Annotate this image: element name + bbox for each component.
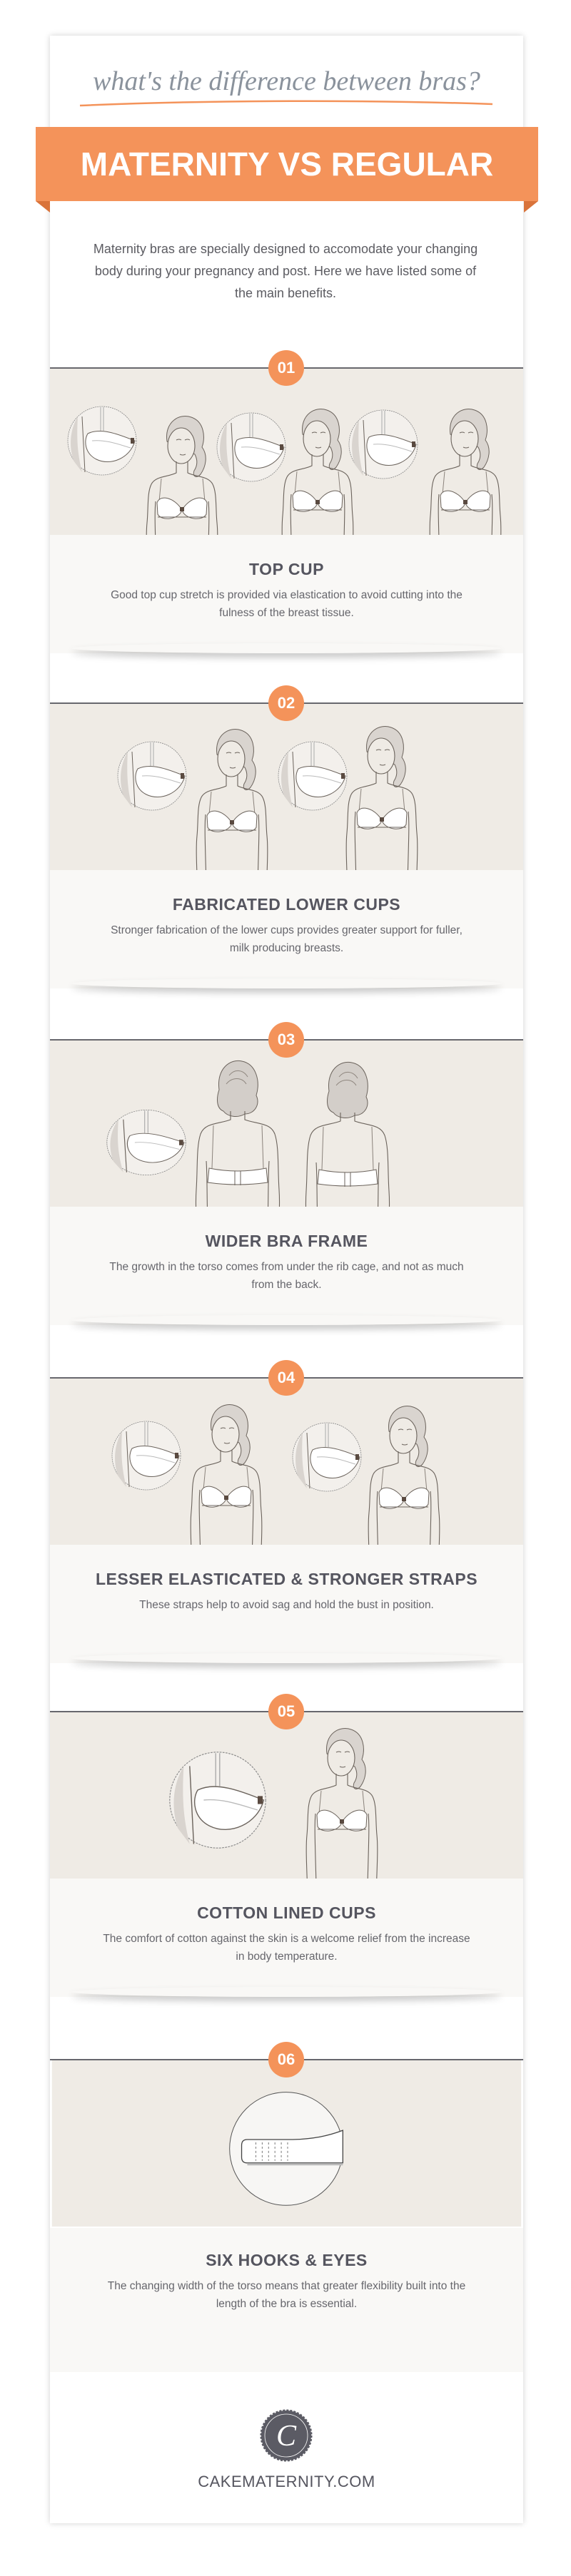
number 02	[268, 685, 304, 721]
heading: six hooks: SIX HOOKS & EYES	[206, 2251, 368, 2269]
number 01: 01	[278, 359, 295, 377]
title underline	[80, 100, 492, 107]
illustration 02	[50, 704, 523, 870]
script title: what's the difference between bras?	[93, 66, 480, 96]
number 03	[268, 1022, 304, 1058]
illustration 06: hooks	[51, 2060, 521, 2227]
website: CAKEMATERNITY.COM	[198, 2473, 375, 2490]
banner	[36, 127, 538, 213]
section 06	[50, 2042, 523, 2372]
number 03: 03	[278, 1031, 295, 1048]
text: wider frame: The growth in the torso comes from under the rib cage, and not as much from the back.	[109, 1261, 464, 1291]
heading: straps: LESSER ELASTICATED & STRONGER STRAPS	[96, 1570, 477, 1588]
section 01	[50, 350, 523, 661]
heading: fabricated lower cups: FABRICATED LOWER CUPS	[173, 895, 400, 914]
section 04	[50, 1360, 523, 1671]
section 03	[50, 1022, 523, 1333]
number 05: 05	[278, 1702, 295, 1720]
heading: wider bra frame: WIDER BRA FRAME	[206, 1232, 368, 1250]
section 05	[50, 1694, 523, 2005]
text: lower cups: Stronger fabrication of the lower cups provides greater support for fuller, milk producing breasts.	[111, 924, 463, 954]
intro text: Maternity bras are specially designed to accomodate your changing body during your pregnancy and post. Here we have listed some of the main benefits.	[94, 242, 477, 300]
number 04	[268, 1360, 304, 1396]
illustration 05	[50, 1712, 523, 1879]
number 06	[268, 2042, 304, 2077]
logo	[260, 2409, 313, 2462]
number 04: 04	[278, 1369, 295, 1386]
text: cotton: The comfort of cotton against the skin is a welcome relief from the increase in body temperature.	[103, 1933, 470, 1963]
heading: cotton lined cups: COTTON LINED CUPS	[197, 1903, 376, 1922]
illustration 03	[50, 1041, 523, 1207]
section 02	[50, 685, 523, 996]
number 05	[268, 1694, 304, 1729]
number 01	[268, 350, 304, 386]
logo: C	[276, 2420, 297, 2453]
banner: MATERNITY VS REGULAR	[81, 145, 493, 183]
text: top cup: Good top cup stretch is provided via elastication to avoid cutting into the fulness of the breast tissue.	[111, 589, 463, 619]
text: straps: These straps help to avoid sag and hold the bust in position.	[139, 1599, 434, 1611]
heading: top cup: TOP CUP	[249, 560, 324, 578]
illustration 01	[50, 369, 523, 535]
text: hooks: The changing width of the torso means that greater flexibility built into the length of the bra is essential.	[108, 2280, 465, 2310]
number 02: 02	[278, 694, 295, 712]
number 06: 06	[278, 2050, 295, 2068]
illustration 04	[50, 1379, 523, 1545]
